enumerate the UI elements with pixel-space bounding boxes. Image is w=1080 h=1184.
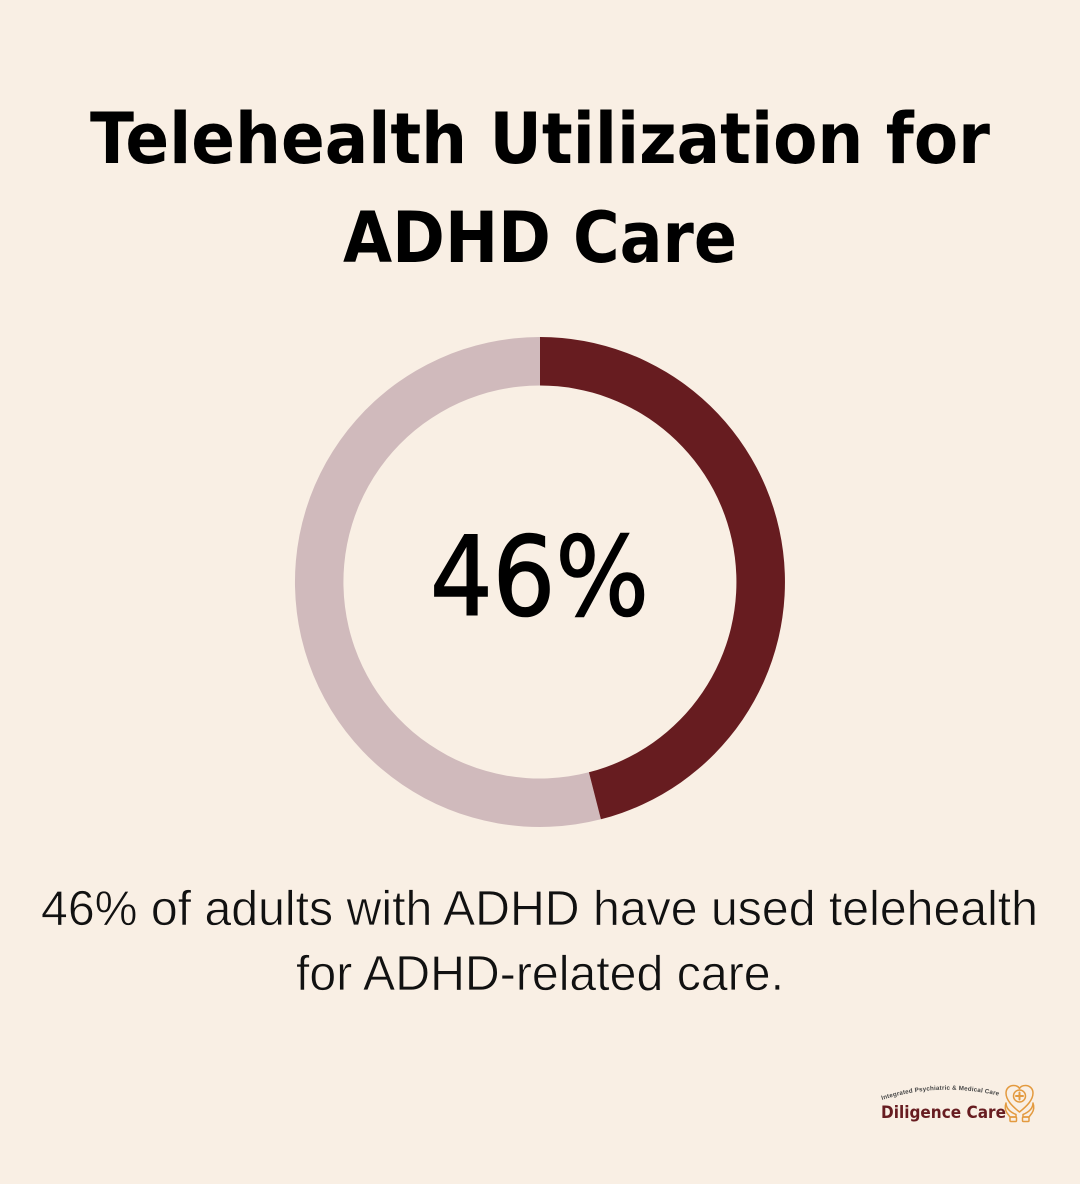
- logo tagline: Integrated Psychiatric & Medical Care: [881, 1085, 999, 1100]
- donut chart: 46%: [295, 337, 785, 827]
- logo: Diligence Care: [881, 1084, 1034, 1122]
- logo icon: heart and hands: [1005, 1086, 1034, 1122]
- remaining 54% ring segment: [295, 337, 601, 827]
- logo wordmark: Diligence Care: [881, 1103, 1006, 1122]
- title: Telehealth Utilization for: [90, 98, 990, 180]
- description text: [41, 882, 1038, 1001]
- title: ADHD Care: [343, 197, 737, 279]
- description text: 46% of adults with ADHD have used telehealth: [41, 882, 1038, 936]
- title: [90, 98, 990, 279]
- description text: for ADHD-related care.: [296, 947, 784, 1001]
- highlighted 46% ring segment: [540, 337, 785, 819]
- center value: 46%: [430, 513, 649, 641]
